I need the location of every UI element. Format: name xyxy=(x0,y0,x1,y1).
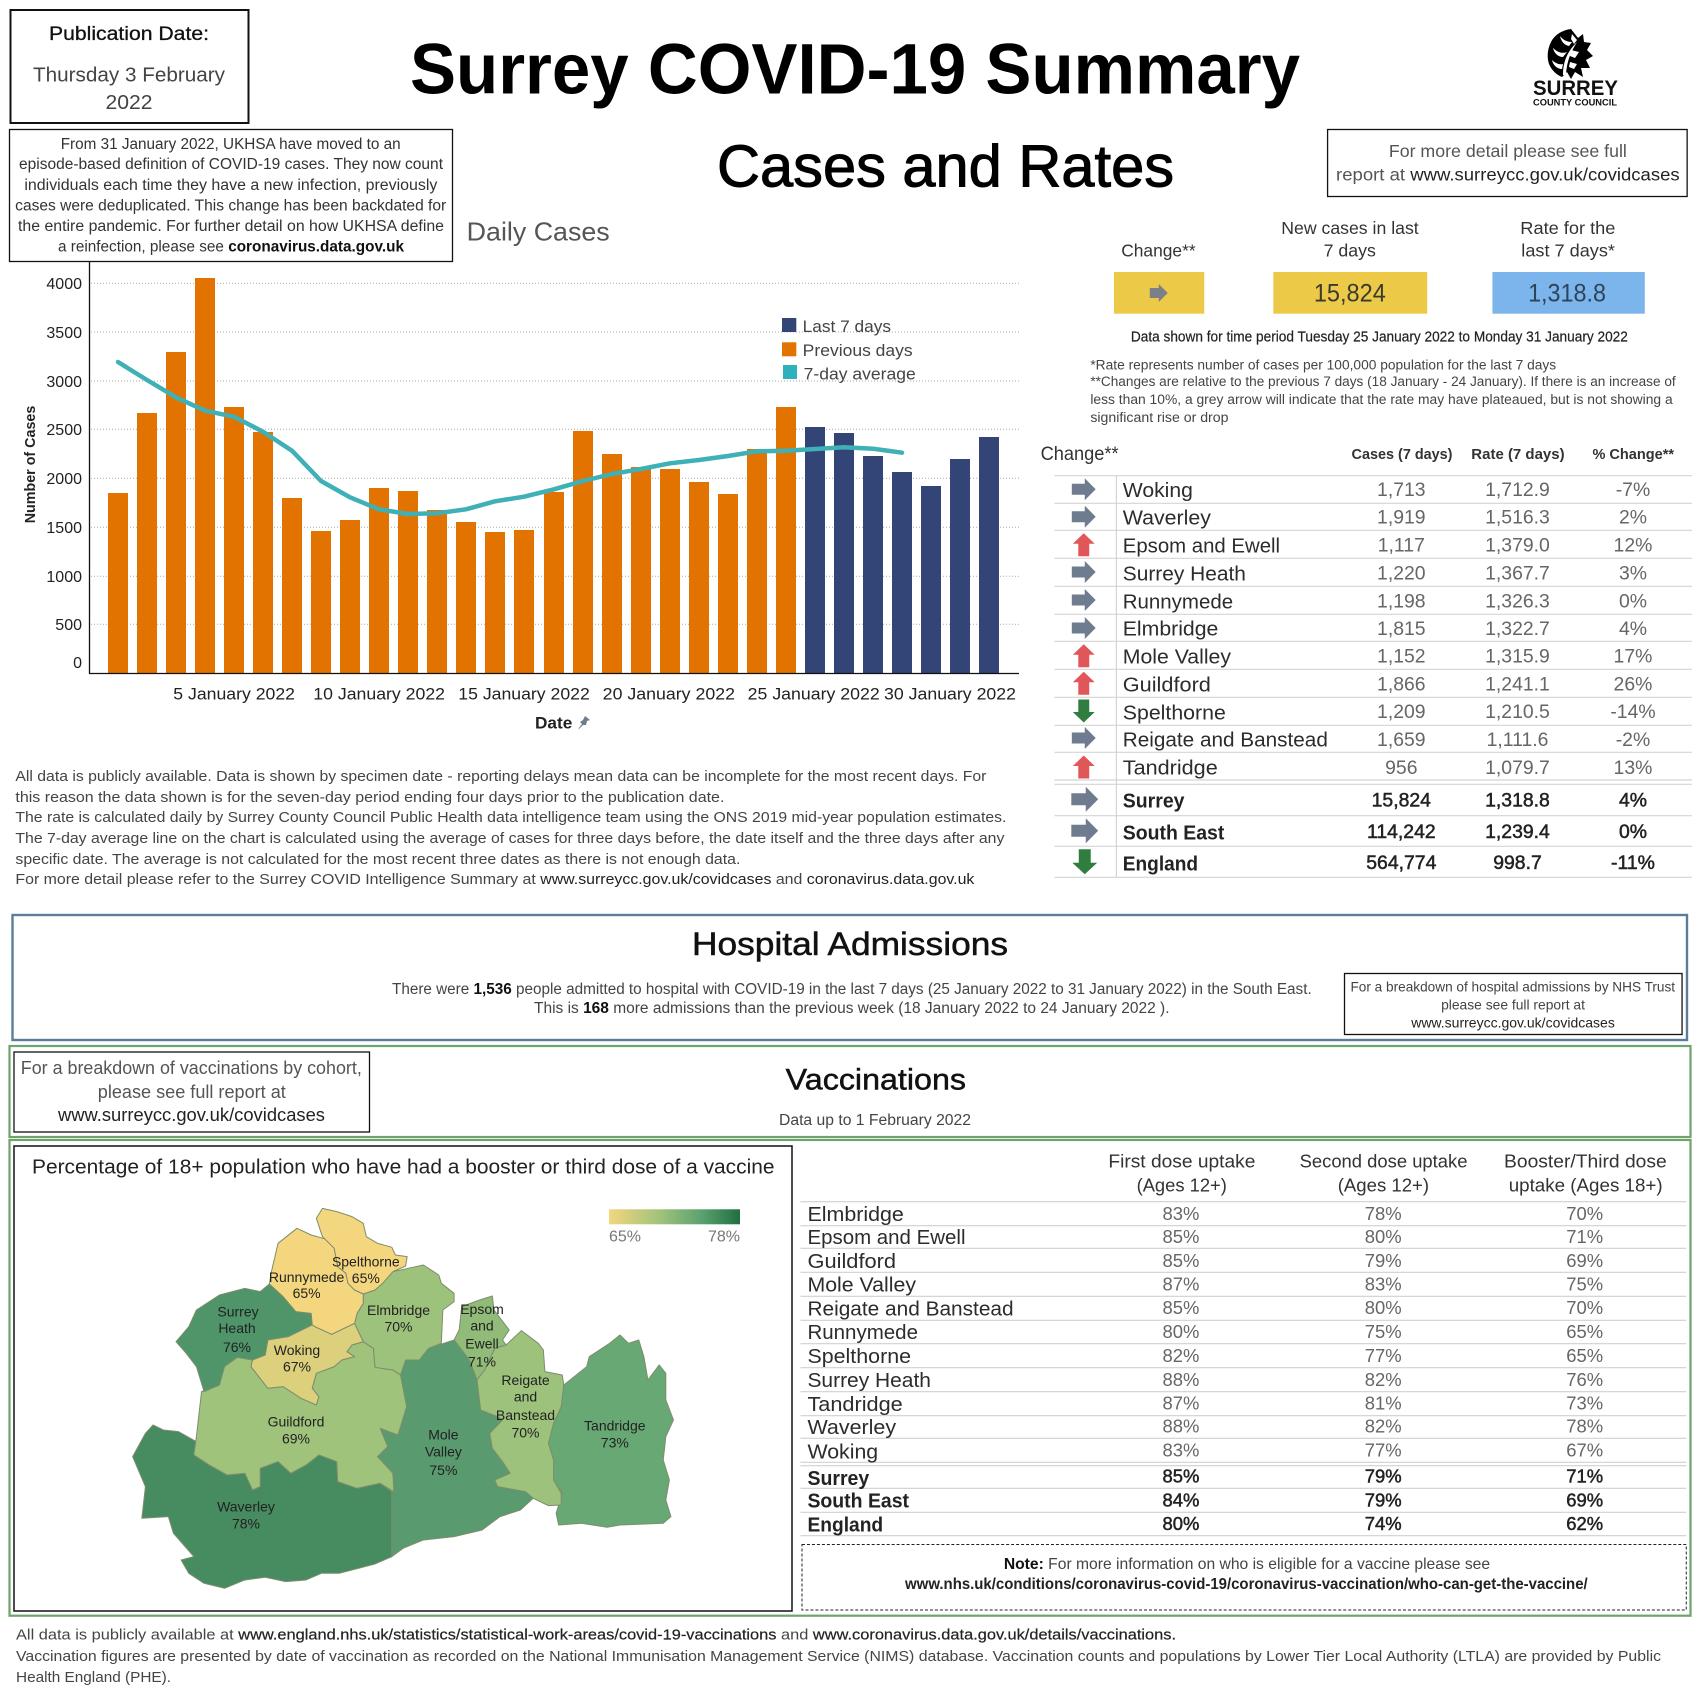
chart legend: Previous days xyxy=(803,341,913,360)
row: Surrey: 15,824 xyxy=(1372,790,1431,812)
row: Woking: 1,713 xyxy=(1377,479,1426,501)
row: Surrey: 85% xyxy=(1163,1466,1199,1487)
row: Reigate and Banstead: Reigate and Banstead xyxy=(807,1299,1014,1321)
row: Surrey Heath: Surrey Heath xyxy=(1123,563,1246,585)
map labels: Epsom xyxy=(460,1301,504,1317)
map labels: Woking xyxy=(274,1342,320,1358)
row: Elmbridge: 78% xyxy=(1365,1203,1402,1224)
row: Guildford: 1,866 xyxy=(1377,673,1426,695)
rate and change notes: *Rate represents number of cases per 100,000 population for the last 7 days xyxy=(1090,356,1556,372)
bar chart: daily cases xyxy=(22,261,1019,733)
row: Mole Valley: Mole Valley xyxy=(1123,647,1231,669)
rate and change notes: less than 10%, a grey arrow will indicate that the rate may have plateaued, but is not showing a xyxy=(1090,391,1673,407)
map labels: Ewell xyxy=(465,1335,499,1351)
row: Epsom and Ewell xyxy=(1073,533,1652,557)
row: Reigate and Banstead: 70% xyxy=(1566,1297,1603,1318)
row: Mole Valley: 1,152 xyxy=(1377,646,1426,668)
rate and change notes xyxy=(1090,356,1676,425)
map labels: 76% xyxy=(223,1339,251,1355)
district: Surrey Heath xyxy=(176,1284,312,1392)
row: Epsom and Ewell: 1,117 xyxy=(1378,534,1425,556)
time period text: Data shown for time period Tuesday 25 January 2022 to Monday 31 January 2022 xyxy=(1131,330,1628,346)
callout: vaccination cohort breakdown: For a breakdown of vaccinations by cohort, xyxy=(21,1058,362,1078)
table header: uptake (Ages 18+) xyxy=(1509,1175,1663,1196)
row: Surrey: 71% xyxy=(1566,1466,1603,1487)
map labels xyxy=(217,1254,646,1531)
map legend: colour scale xyxy=(609,1209,740,1246)
callout: vaccine eligibility note: www.nhs.uk/conditions/coronavirus-covid-19/coronavirus-vaccination/who-can-get-the-vaccine/ xyxy=(904,1576,1588,1593)
map labels: Heath xyxy=(218,1320,256,1336)
map labels: Surrey xyxy=(217,1304,259,1320)
chart footnote text xyxy=(15,768,1006,888)
row: Surrey Heath: 1,367.7 xyxy=(1485,562,1550,584)
row: South East: 79% xyxy=(1365,1490,1402,1511)
callout: UKHSA episode-based definition note: From 31 January 2022, UKHSA have moved to an xyxy=(61,136,401,153)
x axis labels: 25 January 2022 xyxy=(748,684,880,703)
row: Woking xyxy=(807,1440,1603,1463)
row: Epsom and Ewell: 80% xyxy=(1365,1226,1402,1247)
callout: UKHSA episode-based definition note xyxy=(10,130,452,262)
district: Elmbridge xyxy=(355,1265,454,1375)
publication date box xyxy=(10,10,248,123)
callout: NHS trust breakdown: For a breakdown of hospital admissions by NHS Trust xyxy=(1350,978,1675,995)
x axis labels: 20 January 2022 xyxy=(603,684,735,703)
row: Elmbridge: Elmbridge xyxy=(807,1204,904,1226)
KPI: change xyxy=(1114,241,1204,314)
row: Reigate and Banstead: 80% xyxy=(1365,1297,1402,1318)
row: Surrey Heath: 88% xyxy=(1163,1369,1199,1390)
callout: vaccination cohort breakdown xyxy=(14,1052,370,1132)
row: Surrey Heath: 1,220 xyxy=(1377,562,1426,584)
callout: NHS trust breakdown xyxy=(1345,974,1682,1034)
row: Guildford: Guildford xyxy=(1123,674,1211,696)
data date text: Data up to 1 February 2022 xyxy=(779,1112,971,1129)
heading: hospital admissions: Hospital Admissions xyxy=(692,926,1008,962)
vaccination footnote text: All data is publicly available at www.england.nhs.uk/statistics/statistical-work-areas/covid-19-vaccinations and www.coronavirus.data.gov.uk/details/vaccinations. xyxy=(16,1626,1176,1644)
row: Woking: Woking xyxy=(807,1441,878,1463)
y axis labels: 500 xyxy=(55,617,82,634)
map labels: and xyxy=(514,1389,537,1405)
row: South East: 1,239.4 xyxy=(1485,821,1550,843)
row: South East: 114,242 xyxy=(1367,821,1436,843)
row: South East: South East xyxy=(1123,822,1225,844)
callout: vaccine eligibility note: Note: For more information on who is eligible for a vaccine please see xyxy=(1004,1556,1490,1573)
district: Mole Valley xyxy=(378,1340,533,1557)
KPI: rate for the last 7 days: Rate for the xyxy=(1520,218,1615,238)
map labels: 65% xyxy=(293,1285,321,1301)
row: Surrey: Surrey xyxy=(1123,791,1185,813)
row: Epsom and Ewell: 85% xyxy=(1163,1226,1199,1247)
map title: Percentage of 18+ population who have had a booster or third dose of a vaccine xyxy=(32,1156,774,1178)
callout: vaccination cohort breakdown: please see full report at xyxy=(98,1082,286,1102)
row: Tandridge: 13% xyxy=(1614,757,1652,779)
chart legend xyxy=(782,317,916,383)
y axis labels: 3500 xyxy=(46,325,82,342)
row: Mole Valley xyxy=(1073,644,1652,669)
KPI: new cases in last 7 days xyxy=(1273,218,1427,314)
table header: First dose uptake xyxy=(1108,1150,1255,1171)
map labels: Runnymede xyxy=(269,1269,345,1285)
row: Waverley: 1,516.3 xyxy=(1485,507,1550,529)
row: Guildford: 26% xyxy=(1614,673,1652,695)
chart footnote text: The rate is calculated daily by Surrey County Council Public Health data intelligence team using the ONS 2019 mid-year population estimates. xyxy=(15,809,1006,826)
row: Woking: -7% xyxy=(1616,479,1650,501)
vaccination footnote text xyxy=(16,1626,1662,1686)
row: Woking: Woking xyxy=(1123,480,1193,502)
map labels: 71% xyxy=(468,1354,496,1370)
callout: vaccine eligibility note xyxy=(802,1544,1686,1610)
row: Tandridge: 81% xyxy=(1365,1392,1402,1413)
panel: hospital admissions xyxy=(12,915,1687,1040)
row: Guildford: 85% xyxy=(1163,1250,1199,1271)
district: Waverley xyxy=(133,1425,392,1588)
row: Reigate and Banstead: Reigate and Banstead xyxy=(1123,729,1328,751)
heading: vaccinations: Vaccinations xyxy=(786,1064,966,1096)
row: Surrey Heath: 3% xyxy=(1619,562,1647,584)
row: Guildford: 79% xyxy=(1365,1250,1402,1271)
row: Tandridge: 73% xyxy=(1566,1392,1603,1413)
x axis title with pin icon: Date xyxy=(535,714,572,733)
KPI: new cases in last 7 days: 7 days xyxy=(1324,241,1376,261)
chart footnote text: The 7-day average line on the chart is calculated using the average of cases for three days before, the date itself and the three days after any xyxy=(15,830,1005,847)
rate and change notes: **Changes are relative to the previous 7 days (18 January - 24 January). If there is an increase of xyxy=(1090,373,1676,389)
row: Guildford xyxy=(1073,672,1652,696)
row: Waverley xyxy=(1072,506,1647,530)
row: England: 62% xyxy=(1566,1513,1603,1534)
callout: link to full report: report at www.surreycc.gov.uk/covidcases xyxy=(1336,165,1680,185)
KPI: rate for the last 7 days: 1,318.8 xyxy=(1528,280,1606,308)
hospital admissions summary text: This is 168 more admissions than the previous week (18 January 2022 to 24 January 2022 ). xyxy=(534,1000,1170,1017)
row: Surrey: 79% xyxy=(1365,1466,1402,1487)
x axis labels: 15 January 2022 xyxy=(458,684,590,703)
district: Woking xyxy=(251,1323,363,1405)
row: Tandridge xyxy=(1073,756,1652,779)
panel: vaccinations header xyxy=(10,1046,1690,1137)
map labels: 78% xyxy=(232,1515,260,1531)
row: Waverley: 1,919 xyxy=(1377,507,1426,529)
row: Guildford: 69% xyxy=(1566,1250,1603,1271)
callout: UKHSA episode-based definition note: episode-based definition of COVID-19 cases. They now count xyxy=(19,156,444,173)
row: Mole Valley: 1,315.9 xyxy=(1485,646,1550,668)
row: Surrey xyxy=(1071,787,1647,813)
KPI: change: Change** xyxy=(1121,241,1196,261)
callout: UKHSA episode-based definition note: individuals each time they have a new infection, previously xyxy=(24,177,438,194)
row: Elmbridge: 1,815 xyxy=(1377,618,1426,640)
table header: % Change** xyxy=(1592,446,1674,463)
row: Surrey Heath: Surrey Heath xyxy=(807,1370,931,1392)
row: Surrey Heath: 76% xyxy=(1566,1369,1603,1390)
map labels: Spelthorne xyxy=(332,1254,400,1270)
row: South East: South East xyxy=(807,1491,909,1513)
vaccination footnote text: Health England (PHE). xyxy=(16,1669,171,1686)
x axis labels: 10 January 2022 xyxy=(313,684,445,703)
chart legend: Last 7 days xyxy=(803,317,891,336)
row: Tandridge: Tandridge xyxy=(1123,757,1218,779)
row: Epsom and Ewell: Epsom and Ewell xyxy=(1123,535,1280,557)
table header: Booster/Third dose xyxy=(1504,1150,1667,1171)
row: Mole Valley: 17% xyxy=(1614,646,1652,668)
row: Elmbridge xyxy=(1072,617,1647,640)
district: Guildford xyxy=(194,1342,407,1492)
row: South East xyxy=(1071,818,1647,844)
publication date box: Publication Date: xyxy=(49,24,209,45)
row: Surrey: 1,318.8 xyxy=(1485,790,1550,812)
row: Runnymede: 80% xyxy=(1163,1321,1199,1342)
subtitle: cases and rates: Cases and Rates xyxy=(717,134,1174,200)
callout: NHS trust breakdown: please see full report at xyxy=(1441,996,1585,1013)
row: England: 80% xyxy=(1163,1513,1199,1534)
table header: (Ages 12+) xyxy=(1338,1175,1429,1196)
row: England: -11% xyxy=(1611,852,1655,874)
rate and change notes: significant rise or drop xyxy=(1090,409,1229,425)
row: South East: 84% xyxy=(1163,1490,1199,1511)
map labels: Tandridge xyxy=(584,1418,646,1434)
row: Waverley: Waverley xyxy=(1123,508,1211,530)
panel: vaccinations body frame xyxy=(10,1140,1690,1616)
row: Runnymede: 65% xyxy=(1566,1321,1603,1342)
row: Epsom and Ewell xyxy=(807,1226,1603,1249)
row: Runnymede: 1,198 xyxy=(1377,590,1426,612)
row: Spelthorne: 82% xyxy=(1163,1345,1199,1366)
y axis labels: 1000 xyxy=(46,569,82,586)
chart footnote text: specific date. The average is not calculated for the most recent three dates as there is not enough data. xyxy=(15,851,740,868)
map labels: 65% xyxy=(352,1270,380,1286)
table: vaccination uptake xyxy=(800,1150,1686,1537)
row: Reigate and Banstead: -2% xyxy=(1616,729,1650,751)
row: Reigate and Banstead: 1,111.6 xyxy=(1487,729,1548,751)
district: Tandridge xyxy=(548,1335,673,1527)
y axis labels: 4000 xyxy=(46,276,82,293)
row: Epsom and Ewell: 12% xyxy=(1614,534,1652,556)
row: Waverley: 82% xyxy=(1365,1416,1402,1437)
row: Reigate and Banstead xyxy=(807,1297,1603,1321)
row: Woking: 67% xyxy=(1566,1440,1603,1461)
row: Waverley xyxy=(807,1416,1603,1439)
chart footnote text: All data is publicly available. Data is shown by specimen date - reporting delays mean data can be incomplete for the most recent days. For xyxy=(15,768,986,785)
map labels: Waverley xyxy=(217,1499,275,1515)
x axis labels: 5 January 2022 xyxy=(173,684,295,703)
vaccination footnote text: Vaccination figures are presented by date of vaccination as recorded on the National Immunisation Management Service (NIMS) database. Vaccination counts and populations by Lower Tier Local Authority (LTLA) are provided by Public xyxy=(16,1648,1662,1665)
y axis title: Number of Cases xyxy=(22,406,39,523)
row: Mole Valley xyxy=(807,1274,1603,1297)
row: England: England xyxy=(1123,853,1198,875)
row: Epsom and Ewell: Epsom and Ewell xyxy=(807,1227,966,1249)
KPI: new cases in last 7 days: 15,824 xyxy=(1314,280,1386,308)
row: Elmbridge xyxy=(807,1203,1603,1226)
logo: Surrey County Council xyxy=(1533,29,1618,108)
row: Spelthorne: -14% xyxy=(1610,701,1656,723)
chart heading: daily cases: Daily Cases xyxy=(467,217,610,247)
row: Surrey Heath xyxy=(807,1369,1603,1392)
map labels: 69% xyxy=(282,1430,310,1446)
row: Guildford xyxy=(807,1250,1603,1273)
hospital admissions summary text: There were 1,536 people admitted to hospital with COVID-19 in the last 7 days (25 January 2022 to 31 January 2022) in the South East. xyxy=(392,981,1312,998)
callout: UKHSA episode-based definition note: cases were deduplicated. This change has been backdated for xyxy=(15,198,446,215)
row: Runnymede xyxy=(1072,589,1647,613)
x axis labels: 30 January 2022 xyxy=(884,684,1016,703)
row: Reigate and Banstead xyxy=(1072,727,1650,751)
row: Tandridge xyxy=(807,1392,1603,1416)
KPI: rate for the last 7 days xyxy=(1492,218,1645,314)
row: Runnymede: Runnymede xyxy=(1123,591,1233,613)
row: Reigate and Banstead: 85% xyxy=(1163,1297,1199,1318)
row: Elmbridge: 70% xyxy=(1566,1203,1603,1224)
chart legend: 7-day average xyxy=(804,364,916,383)
y axis labels: 2500 xyxy=(46,422,82,439)
title: Surrey COVID-19 Summary xyxy=(410,30,1300,110)
district: Reigate and Banstead xyxy=(477,1331,564,1506)
row: Runnymede: 1,326.3 xyxy=(1485,590,1550,612)
callout: UKHSA episode-based definition note: the entire pandemic. For further detail on how UKHSA define xyxy=(18,218,444,235)
row: Woking: 83% xyxy=(1163,1440,1199,1461)
row: England: England xyxy=(807,1515,883,1537)
KPI: new cases in last 7 days: New cases in last xyxy=(1281,218,1419,238)
row: Surrey: Surrey xyxy=(807,1468,869,1490)
KPI: rate for the last 7 days: last 7 days* xyxy=(1521,241,1615,261)
row: Surrey Heath xyxy=(1072,561,1647,585)
row: England: 564,774 xyxy=(1366,852,1437,874)
row: Reigate and Banstead: 1,659 xyxy=(1377,729,1426,751)
row: Mole Valley: 75% xyxy=(1566,1274,1603,1295)
row: Waverley: 78% xyxy=(1566,1416,1603,1437)
logo: Surrey County Council: SURREY xyxy=(1533,77,1618,100)
map labels: 67% xyxy=(283,1359,311,1375)
row: Waverley: 2% xyxy=(1619,507,1647,529)
map legend: colour scale: 78% xyxy=(708,1229,740,1246)
row: Woking xyxy=(1072,478,1650,502)
publication date box: 2022 xyxy=(106,92,152,114)
row: Woking: 1,712.9 xyxy=(1485,479,1550,501)
hospital admissions summary text xyxy=(392,981,1312,1017)
district: Spelthorne xyxy=(316,1208,407,1294)
district: Epsom and Ewell xyxy=(454,1296,509,1380)
table header xyxy=(1041,444,1674,465)
row: Woking: 77% xyxy=(1365,1440,1402,1461)
row: Tandridge: 956 xyxy=(1385,757,1418,779)
district: Runnymede xyxy=(269,1228,363,1334)
map: Surrey districts xyxy=(133,1208,673,1588)
row: Elmbridge: 1,322.7 xyxy=(1485,618,1550,640)
map labels: 73% xyxy=(601,1434,629,1450)
row: Spelthorne: 1,209 xyxy=(1377,701,1426,723)
map labels: Mole xyxy=(428,1427,459,1443)
callout: vaccination cohort breakdown: www.surreycc.gov.uk/covidcases xyxy=(57,1105,325,1125)
row: Spelthorne: 65% xyxy=(1566,1345,1603,1366)
row: Elmbridge: 4% xyxy=(1619,618,1647,640)
y axis labels: 3000 xyxy=(46,374,82,391)
row: Tandridge: 87% xyxy=(1163,1392,1199,1413)
row: Epsom and Ewell: 1,379.0 xyxy=(1485,534,1550,556)
row: Spelthorne xyxy=(1073,700,1656,724)
row: Elmbridge: 83% xyxy=(1163,1203,1199,1224)
row: Mole Valley: 87% xyxy=(1163,1274,1199,1295)
table header: Second dose uptake xyxy=(1300,1150,1467,1171)
row: Tandridge: Tandridge xyxy=(807,1394,903,1416)
row: Mole Valley: Mole Valley xyxy=(807,1275,916,1297)
map labels: Reigate xyxy=(501,1372,550,1388)
x axis title with pin icon xyxy=(535,714,590,733)
row: Runnymede: Runnymede xyxy=(807,1322,918,1344)
row: Guildford: Guildford xyxy=(807,1251,896,1273)
callout: UKHSA episode-based definition note: a reinfection, please see coronavirus.data.gov.uk xyxy=(58,239,404,256)
map legend: colour scale: 65% xyxy=(609,1229,641,1246)
callout: link to full report xyxy=(1328,130,1687,196)
y axis labels xyxy=(46,276,82,672)
row: England xyxy=(1072,849,1655,875)
table header: Change** xyxy=(1041,444,1119,465)
y axis labels: 0 xyxy=(73,655,82,672)
row: Spelthorne: Spelthorne xyxy=(1123,702,1226,724)
table header: Cases (7 days) xyxy=(1352,446,1453,463)
row: Epsom and Ewell: 71% xyxy=(1566,1226,1603,1247)
chart footnote text: For more detail please refer to the Surrey COVID Intelligence Summary at www.surreycc.gov.uk/covidcases and coronavirus.data.gov.uk xyxy=(15,871,975,888)
row: Surrey Heath: 82% xyxy=(1365,1369,1402,1390)
x axis labels xyxy=(173,684,1016,703)
row: Waverley: 88% xyxy=(1163,1416,1199,1437)
row: South East: 69% xyxy=(1566,1490,1603,1511)
table header: Rate (7 days) xyxy=(1471,446,1565,463)
row: Spelthorne: 77% xyxy=(1365,1345,1402,1366)
row: South East: 0% xyxy=(1619,821,1647,843)
publication date box: Thursday 3 February xyxy=(33,65,225,87)
table header: (Ages 12+) xyxy=(1137,1175,1227,1196)
row: Elmbridge: Elmbridge xyxy=(1123,618,1218,640)
row: England xyxy=(807,1513,1603,1537)
map labels: 70% xyxy=(511,1425,540,1441)
map labels: Banstead xyxy=(496,1407,555,1423)
table: cases by district xyxy=(1041,444,1692,877)
row: Runnymede: 0% xyxy=(1619,590,1647,612)
y axis labels: 2000 xyxy=(46,471,82,488)
callout: NHS trust breakdown: www.surreycc.gov.uk/covidcases xyxy=(1410,1014,1615,1031)
row: Mole Valley: 83% xyxy=(1365,1274,1402,1295)
panel: booster map xyxy=(14,1146,792,1611)
map labels: 70% xyxy=(384,1319,413,1335)
row: Spelthorne: 1,210.5 xyxy=(1485,701,1550,723)
map labels: Guildford xyxy=(268,1414,324,1430)
row: Guildford: 1,241.1 xyxy=(1485,673,1550,695)
row: Spelthorne xyxy=(807,1345,1603,1368)
map labels: Valley xyxy=(425,1444,462,1460)
table header xyxy=(1108,1150,1667,1196)
map labels: and xyxy=(470,1318,494,1334)
row: England: 998.7 xyxy=(1493,852,1542,874)
chart footnote text: this reason the data shown is for the seven-day period ending four days prior to the publication date. xyxy=(15,789,724,806)
row: Spelthorne: Spelthorne xyxy=(807,1346,911,1368)
row: England: 74% xyxy=(1365,1513,1402,1534)
row: Surrey xyxy=(807,1466,1603,1490)
row: Surrey: 4% xyxy=(1619,790,1647,812)
map labels: 75% xyxy=(429,1462,457,1478)
row: Runnymede xyxy=(807,1321,1603,1344)
row: South East xyxy=(807,1490,1603,1513)
y axis labels: 1500 xyxy=(46,520,82,537)
row: Tandridge: 1,079.7 xyxy=(1485,757,1550,779)
row: Runnymede: 75% xyxy=(1365,1321,1402,1342)
row: Waverley: Waverley xyxy=(807,1417,896,1439)
map labels: Elmbridge xyxy=(367,1302,430,1318)
callout: link to full report: For more detail please see full xyxy=(1389,141,1627,161)
logo: Surrey County Council: COUNTY COUNCIL xyxy=(1533,98,1618,108)
